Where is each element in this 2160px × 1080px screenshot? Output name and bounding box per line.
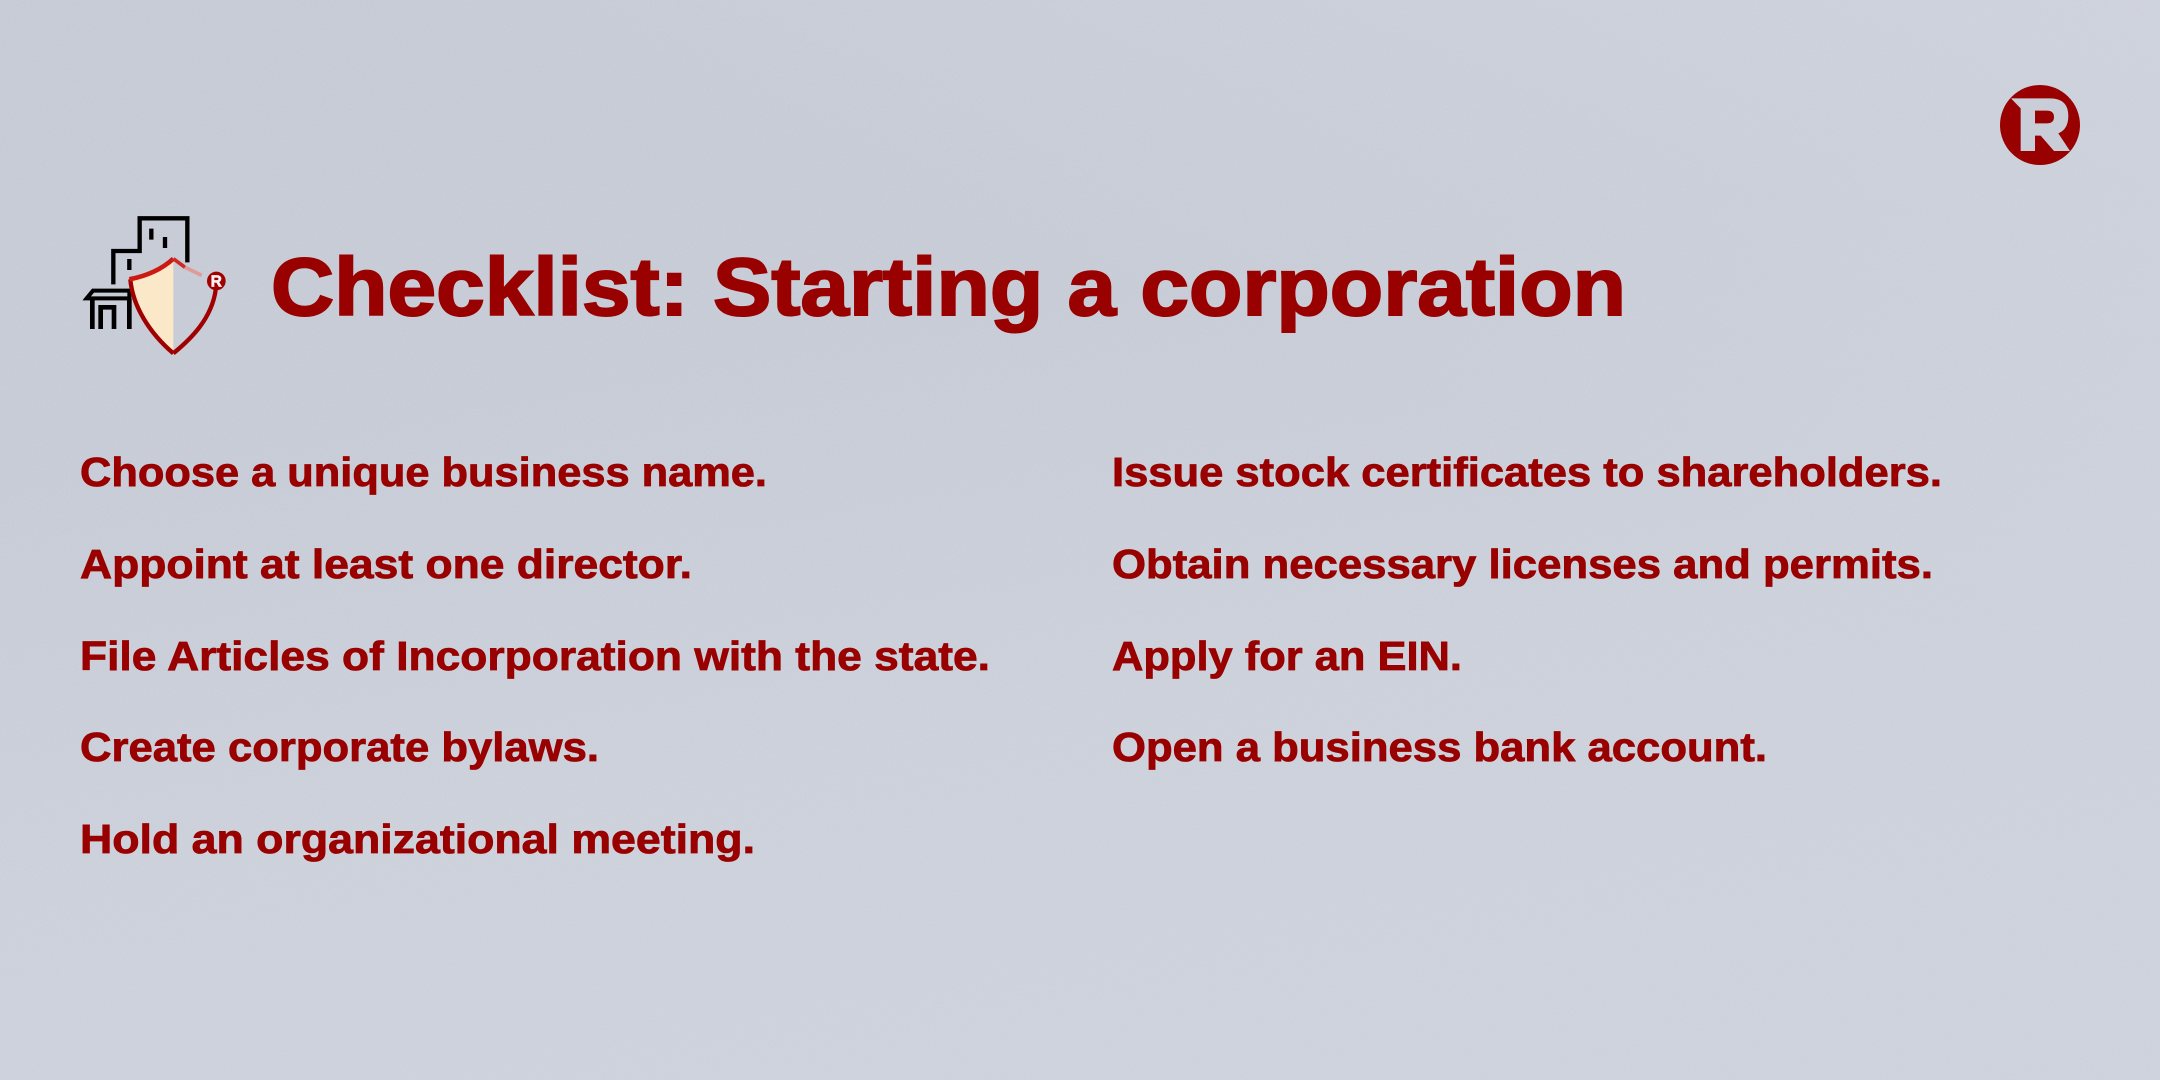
title: Checklist: Starting a corporation xyxy=(271,242,1626,333)
icon part: office building xyxy=(113,218,187,284)
icon: building and shield xyxy=(87,218,226,353)
checklist: right column xyxy=(1112,449,1942,770)
item 7: Obtain necessary licenses and permits. xyxy=(1112,541,1933,587)
logo: R badge xyxy=(2000,85,2080,165)
item 8: Apply for an EIN. xyxy=(1112,633,1462,679)
item 4: Create corporate bylaws. xyxy=(80,724,599,770)
item 3: File Articles of Incorporation with the state. xyxy=(80,633,990,679)
checklist: left column xyxy=(80,449,990,862)
item 5: Hold an organizational meeting. xyxy=(80,816,755,862)
item 1: Choose a unique business name. xyxy=(80,449,767,495)
icon part: shield xyxy=(129,259,216,353)
item 2: Appoint at least one director. xyxy=(80,541,692,587)
icon part: small portico xyxy=(87,291,129,329)
icon part: registered badge: R xyxy=(211,274,222,291)
item 9: Open a business bank account. xyxy=(1112,724,1767,770)
item 6: Issue stock certificates to shareholders. xyxy=(1112,449,1942,495)
